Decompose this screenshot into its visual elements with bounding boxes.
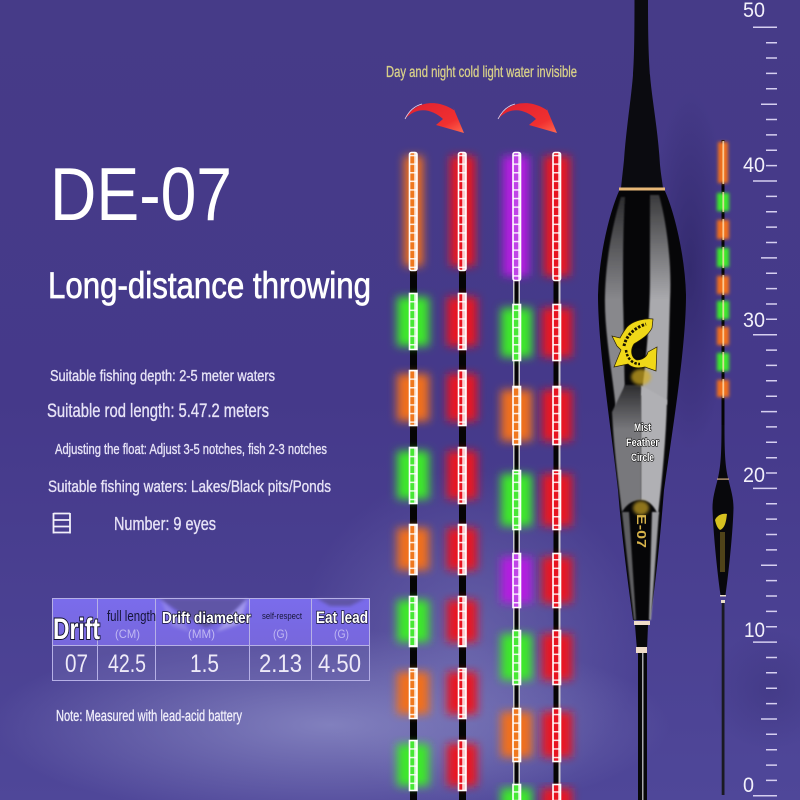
small float label dots — [720, 532, 725, 572]
table value: 42.5: 42.5 — [108, 650, 146, 678]
table header: drift: Drift — [53, 613, 100, 646]
spec: adjusting the float: Adjusting the float: Adjust 3-5 notches, fish 2-3 notches — [55, 441, 327, 458]
float left highlight band — [605, 197, 625, 410]
float model text: E-07 — [634, 514, 649, 548]
table value: 2.13: 2.13 — [259, 650, 302, 678]
float middle right highlight — [641, 385, 667, 515]
float label: mist feather circle — [626, 422, 660, 464]
small float ring — [717, 478, 729, 480]
large float — [598, 0, 686, 800]
small float body — [712, 425, 734, 595]
small float long rod — [722, 603, 724, 795]
float middle left highlight — [612, 385, 641, 512]
table header: drift diameter — [162, 610, 251, 641]
table header: eat lead: (G) — [334, 627, 349, 641]
gold glow at label — [633, 501, 649, 515]
specification text list — [47, 368, 331, 534]
table header: eat lead — [316, 608, 368, 641]
spec: rod length: Suitable rod length: 5.47.2 meters — [47, 400, 269, 422]
float label: mist feather circle: Circle — [631, 452, 654, 464]
table value: 07: 07 — [65, 650, 88, 678]
arrow: second curved red — [498, 103, 557, 133]
small float logo — [715, 514, 727, 530]
ruler ticks — [753, 27, 777, 796]
caption: day and night cold light: Day and night cold light water invisible — [386, 64, 577, 81]
arrow: first curved red — [405, 103, 464, 133]
light stick column 1: orange and green — [397, 152, 429, 800]
white rings and collar — [634, 621, 650, 653]
float right highlight band — [641, 195, 670, 405]
ruler label 20: 20 — [743, 464, 765, 487]
note: Note: Measured with lead-acid battery — [56, 708, 242, 725]
ruler label 10: 10 — [744, 619, 765, 642]
table header: full length: full length — [107, 608, 156, 625]
small float with light segments — [712, 140, 734, 795]
ruler label 30: 30 — [743, 309, 765, 332]
float lower right strip — [649, 512, 659, 620]
float body — [598, 189, 686, 620]
light stick column 2: red — [447, 152, 477, 800]
table header: drift diameter: (MM) — [188, 627, 215, 641]
float rod — [638, 650, 647, 800]
table header: self-respect: (G) — [273, 627, 288, 641]
table header: eat lead: Eat lead — [316, 608, 368, 627]
spec: fishing depth: Suitable fishing depth: 2-5 meter waters — [50, 368, 275, 385]
icon: golden fish — [612, 319, 657, 385]
ruler label 40: 40 — [743, 154, 765, 177]
gold ring — [619, 188, 665, 190]
small float lower rings — [720, 595, 726, 596]
specification table — [52, 598, 370, 681]
small float lower tip — [721, 600, 725, 603]
light stick column 4: red — [542, 152, 572, 800]
float label: mist feather circle: Feather — [626, 437, 660, 449]
spec: fishing waters: Suitable fishing waters: Lakes/Black pits/Ponds — [48, 477, 331, 496]
title: DE-07: DE-07 — [50, 152, 232, 236]
ruler label 0: 0 — [743, 774, 754, 797]
table header: drift diameter: Drift diameter — [162, 610, 251, 627]
table header: self-respect: self-respect — [262, 611, 302, 621]
small segments glow — [717, 142, 729, 397]
float stem — [621, 0, 663, 188]
small segments core — [722, 141, 724, 398]
table header: full length: (CM) — [115, 627, 140, 641]
small rod — [722, 140, 724, 430]
centimetre ruler — [743, 0, 777, 797]
light stick column 3: purple, green and orange — [501, 152, 532, 800]
heading: long-distance throwing: Long-distance throwing — [48, 265, 371, 306]
table value: 1.5: 1.5 — [190, 650, 219, 678]
table header: full length — [107, 608, 156, 641]
table header: self-respect — [262, 611, 302, 641]
table value: 4.50: 4.50 — [318, 650, 361, 678]
float label: mist feather circle: Mist — [634, 422, 651, 434]
float lower left strip — [622, 512, 636, 620]
spec: number of eyes: Number: 9 eyes — [114, 513, 216, 534]
icon: ladder — [54, 513, 70, 534]
